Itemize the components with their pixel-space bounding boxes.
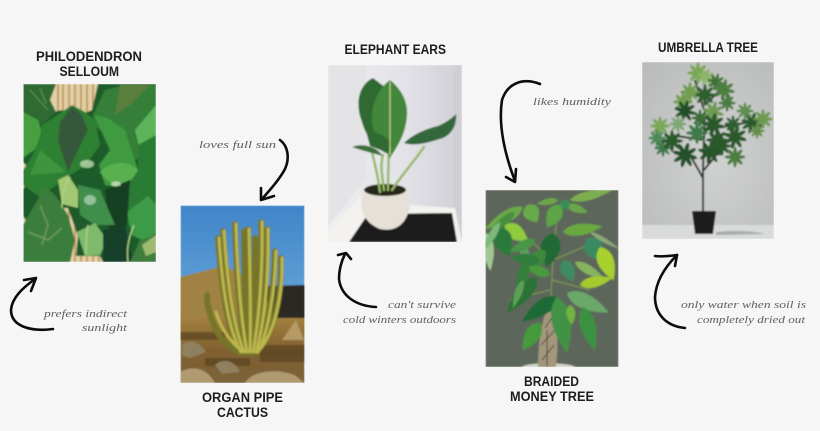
note: only water when soil is completely dried out [681, 299, 806, 326]
heading: organ pipe cactus: CACTUS [217, 405, 268, 420]
arrow: to money tree [501, 81, 540, 182]
photo: philodendron leaves [23, 84, 156, 262]
heading: organ pipe cactus [202, 390, 283, 420]
heading: organ pipe cactus: ORGAN PIPE [202, 390, 283, 405]
panel: elephant ears [328, 42, 462, 326]
photo: umbrella tree [642, 62, 774, 239]
heading: philodendron selloum [36, 49, 142, 79]
note: can't survive cold winters outdoors [343, 299, 456, 326]
heading: braided money tree: BRAIDED [524, 374, 579, 389]
note: prefers indirect sunlight: prefers indirect [43, 308, 128, 320]
arrow: to philodendron [11, 278, 53, 330]
heading: philodendron selloum: PHILODENDRON [36, 49, 142, 64]
photo: braided money tree [480, 186, 621, 367]
heading: umbrella tree: UMBRELLA TREE [658, 40, 758, 55]
note: likes humidity: likes humidity [533, 96, 611, 108]
note: prefers indirect sunlight: sunlight [82, 322, 128, 334]
photo: elephant ears [328, 65, 462, 242]
heading: philodendron selloum: SELLOUM [60, 64, 119, 79]
note: loves full sun: loves full sun [199, 139, 277, 151]
note: can't survive cold winters outdoors: can't survive [388, 299, 456, 311]
arrow: to elephant ears [338, 253, 376, 307]
heading: braided money tree: MONEY TREE [510, 389, 594, 404]
note: can't survive cold winters outdoors: cold winters outdoors [343, 314, 456, 326]
heading: elephant ears: ELEPHANT EARS [344, 42, 446, 57]
panel: philodendron selloum [11, 49, 156, 334]
arrow: to umbrella tree [655, 255, 685, 328]
note: only water when soil is completely dried out: completely dried out [697, 314, 806, 326]
note: prefers indirect sunlight [43, 308, 128, 334]
panel: umbrella tree [642, 40, 806, 328]
arrow: to cactus [261, 140, 288, 200]
photo: organ pipe cactus [180, 206, 305, 383]
panel: braided money tree [480, 81, 621, 404]
panel: organ pipe cactus [180, 139, 305, 420]
heading: braided money tree [510, 374, 594, 404]
note: only water when soil is completely dried out: only water when soil is [681, 299, 806, 311]
